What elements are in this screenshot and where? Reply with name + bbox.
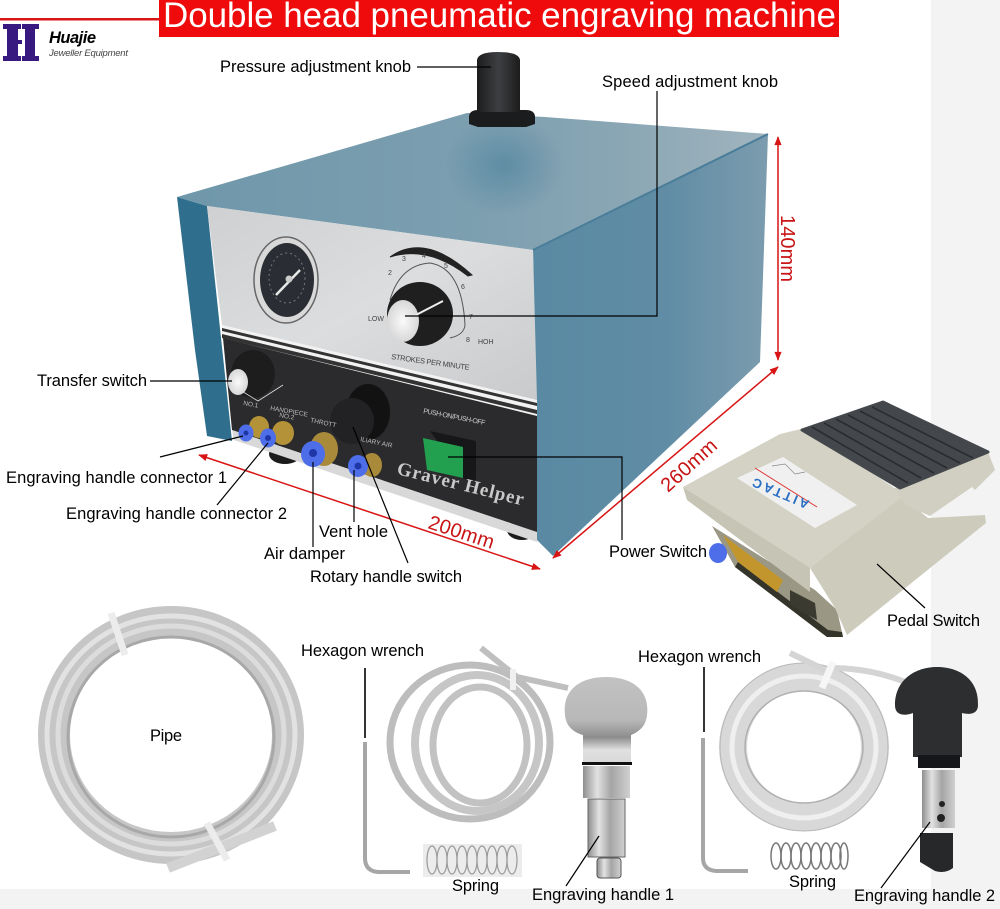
label: Transfer switch: Transfer switch: [37, 372, 147, 390]
pedal switch: [683, 402, 995, 637]
rubber feet: [269, 444, 537, 540]
dimension: 200mm: [199, 455, 540, 569]
label: Spring 2: Spring: [789, 873, 836, 891]
underside and slot: [712, 526, 843, 637]
spring 2: [771, 843, 848, 869]
speed dial and knob: 2: [388, 270, 392, 277]
spring 1: [423, 844, 522, 877]
black handle: [895, 667, 978, 872]
pipe coil: [47, 613, 295, 868]
power switch: [423, 431, 476, 480]
speed dial and knob: 8: [466, 337, 470, 344]
transfer switch knob: [228, 350, 283, 401]
blue air connectors: [238, 416, 382, 477]
Graver Helper brand: Graver Helper: [395, 458, 527, 510]
panel small labels: [243, 400, 486, 450]
speed dial and knob: STROKES PER MINUTE: [391, 352, 470, 372]
label: Pressure adjustment knob: Pressure adjustment knob: [220, 58, 411, 76]
top cover: [683, 428, 905, 568]
label: Engraving handle 2: Engraving handle 2: [854, 887, 995, 905]
label sticker: [737, 457, 857, 528]
foot pedal pad: [802, 402, 988, 488]
base flap: [810, 495, 986, 635]
hexagon wrench 1: [365, 742, 410, 872]
front panel: [207, 206, 537, 542]
speed dial and knob: 4: [422, 253, 426, 260]
speed dial and knob: 3: [402, 256, 406, 263]
dimension: 140mm: 140mm: [776, 215, 798, 282]
label sticker: AITTAC: [750, 475, 811, 512]
panel small labels: NO.2: [279, 412, 295, 422]
dimension: 260mm: [553, 367, 778, 558]
label: Power Switch: Power Switch: [609, 543, 707, 561]
speed dial and knob: 5: [444, 263, 448, 270]
label: Air damper: Air damper: [264, 545, 346, 563]
speed dial and knob: [368, 248, 494, 372]
label: Spring 1: Spring: [452, 877, 499, 895]
hexagon wrench 2: [703, 738, 748, 871]
machine casing: [177, 113, 768, 556]
dimension: 260mm: 260mm: [657, 435, 722, 497]
silver handle: [565, 677, 647, 878]
engraving handle 2 with hose: [720, 653, 978, 872]
pedal arm: [895, 452, 995, 516]
machine: engraving unit: [177, 52, 768, 556]
rotary knob: [330, 384, 390, 444]
label: Vent hole: Vent hole: [319, 523, 388, 541]
hose coil: [720, 653, 905, 831]
label: Hexagon wrench 2: Hexagon wrench: [638, 648, 761, 666]
speed dial and knob: HOH: [478, 339, 494, 346]
label: Speed adjustment knob: Speed adjustment knob: [602, 73, 778, 91]
panel small labels: THROTT: [310, 417, 337, 429]
pressure gauge: [254, 237, 318, 323]
label: Engraving handle connector 2: Engraving handle connector 2: [66, 505, 287, 523]
speed dial and knob: LOW: [368, 316, 384, 323]
engraving handle 1 with hose: [390, 648, 647, 878]
label: Pedal Switch: Pedal Switch: [887, 612, 980, 630]
blue connector: [709, 543, 727, 563]
brass valve: [723, 535, 783, 592]
label: Engraving handle connector 1: Engraving handle connector 1: [6, 469, 227, 487]
hose coil: [390, 648, 568, 819]
speed dial and knob: 6: [461, 284, 465, 291]
front plate: [683, 487, 810, 592]
label: Pipe: Pipe: [150, 727, 182, 745]
panel small labels: ILIARY AIR: [360, 436, 393, 450]
logo: Huajie: [3, 24, 128, 61]
panel small labels: NO.1: [243, 400, 259, 410]
dimension: 200mm: 200mm: [425, 512, 497, 554]
logo: Huajie: Jeweller Equipment: [48, 48, 128, 59]
label: Hexagon wrench 1: Hexagon wrench: [301, 642, 424, 660]
top pressure knob: [469, 52, 535, 127]
panel small labels: HANDPIECE: [270, 405, 309, 419]
label: Engraving handle 1: Engraving handle 1: [532, 886, 674, 904]
callout lines: [150, 67, 930, 888]
panel small labels: PUSH-ON/PUSH-OFF: [423, 408, 486, 427]
logo: Huajie: Huajie: [49, 29, 96, 47]
speed dial and knob: 7: [469, 314, 473, 321]
label: Rotary handle switch: Rotary handle switch: [310, 568, 462, 586]
